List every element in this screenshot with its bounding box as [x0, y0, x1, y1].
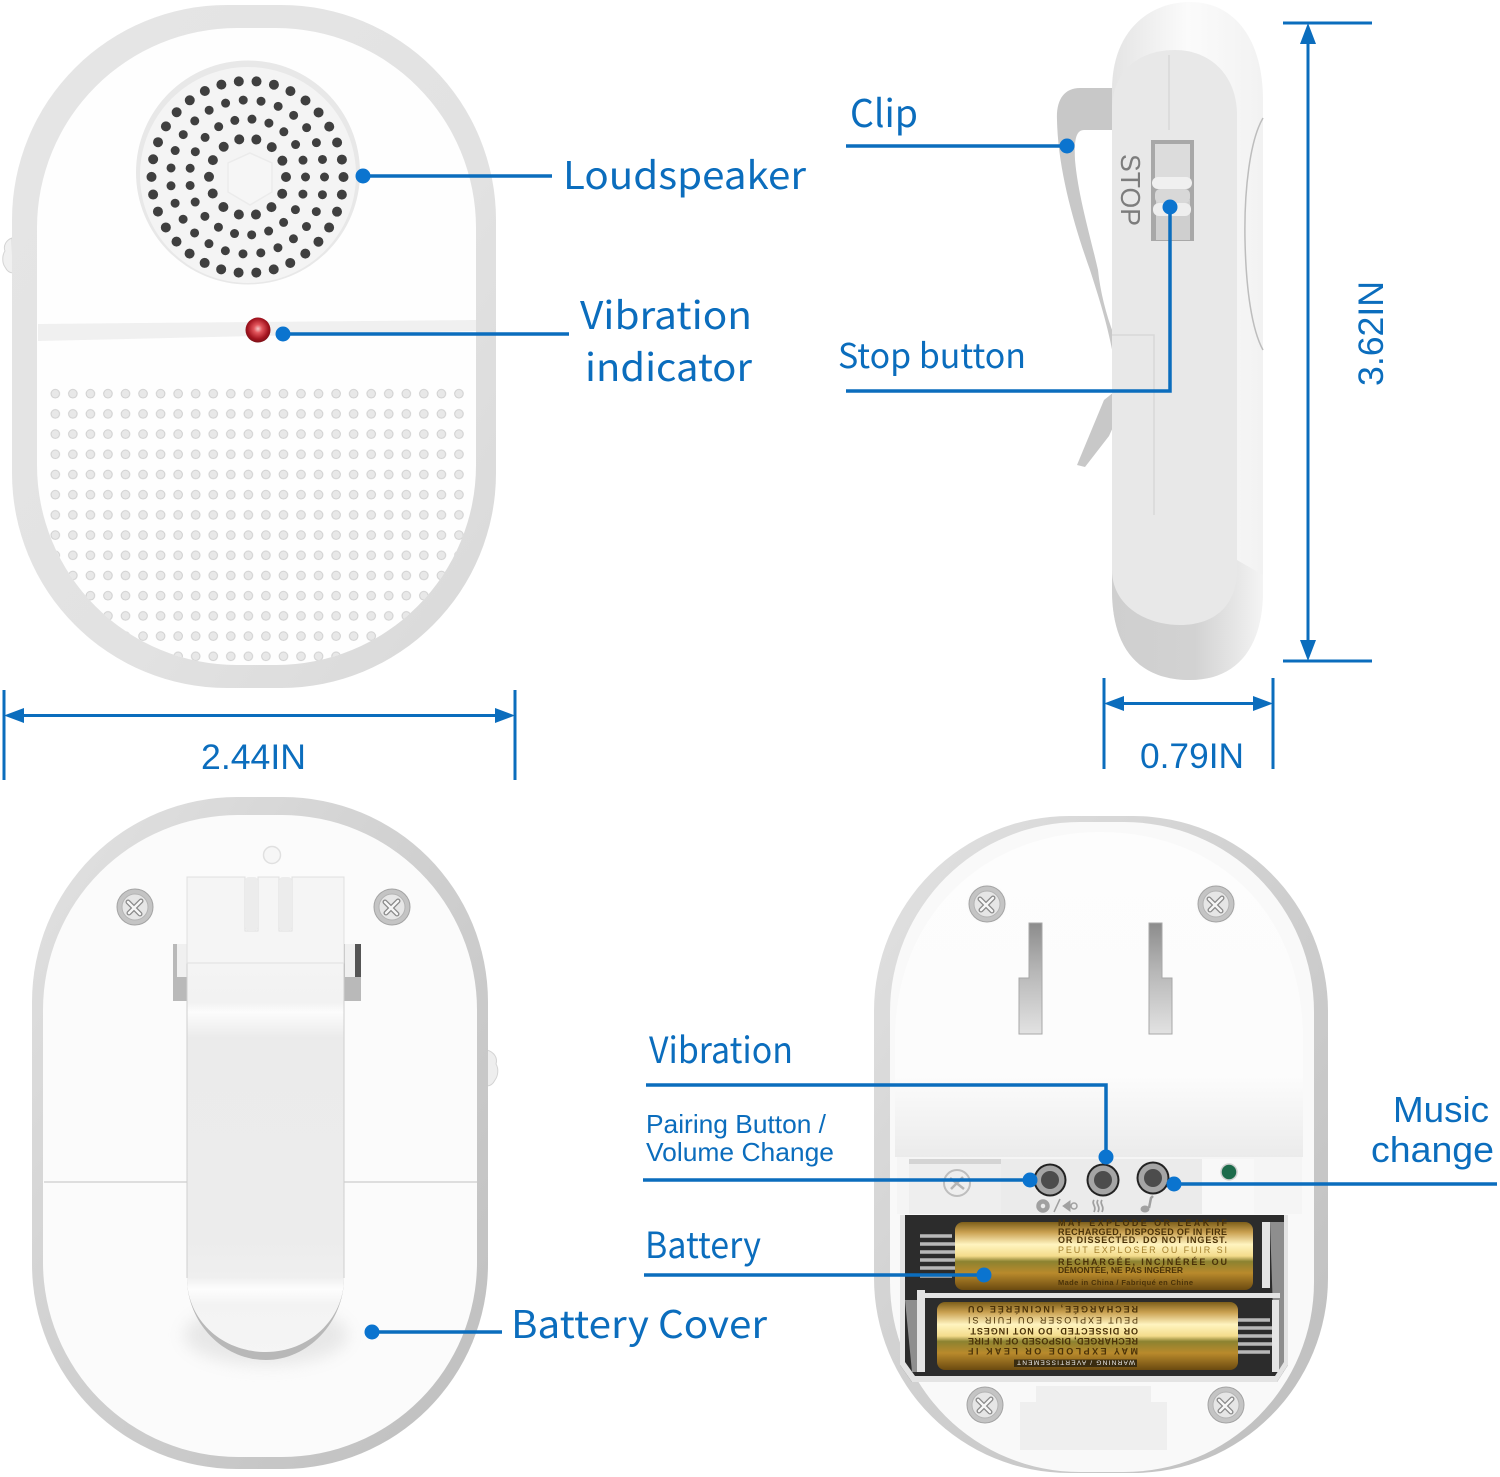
callout: Vibration indicator: indicator [585, 337, 752, 392]
battery spring top [920, 1236, 956, 1276]
opened top-right screw [1196, 884, 1236, 924]
back top-left screw [115, 887, 155, 927]
side face [1112, 50, 1237, 625]
battery top: Made in China / Fabriqué en Chine [1058, 1278, 1193, 1287]
bottom tab [1020, 1386, 1167, 1450]
front white face [37, 28, 476, 665]
side shell [1112, 2, 1263, 680]
callout: Battery Cover: Battery Cover [511, 1294, 767, 1349]
dimension: height 3.62IN [1283, 23, 1391, 661]
control strip [897, 1157, 1302, 1214]
icon: music note [1141, 1196, 1153, 1212]
icon: vibration waves [1093, 1200, 1103, 1212]
callout: Music change: Music [1393, 1089, 1489, 1130]
callout: Pairing Button / Volume Change: Volume Change [646, 1137, 834, 1167]
battery bottom [937, 1302, 1238, 1370]
battery top: RECHARGED, DISPOSED OF IN FIRE [1058, 1227, 1227, 1237]
seam of battery cover [44, 1181, 477, 1183]
dimension: depth 0.79IN [1104, 678, 1273, 776]
icon: settings and volume [1038, 1199, 1077, 1212]
battery top [955, 1218, 1253, 1290]
battery spring bottom [1238, 1320, 1272, 1352]
callout: Vibration [646, 1022, 1114, 1164]
speaker bulge outline [1245, 118, 1263, 350]
callout: Vibration: Vibration [649, 1022, 793, 1074]
opened bottom-right screw [1206, 1385, 1246, 1425]
panel: back view with clip [32, 797, 498, 1469]
callout: Loudspeaker: Loudspeaker [563, 145, 806, 200]
battery compartment [900, 1215, 1288, 1382]
keyhole slot right [1149, 923, 1172, 1034]
speaker grille [136, 60, 360, 284]
dimension: depth 0.79IN: 0.79IN [1140, 737, 1244, 776]
front outer shell [12, 5, 496, 688]
battery bottom: PEUT EXPLOSER OU FUIR SI [968, 1315, 1138, 1325]
indicator groove [38, 320, 476, 341]
button: music [1136, 1162, 1170, 1194]
opened outer shell [874, 816, 1328, 1473]
stop switch [1151, 140, 1194, 241]
panel: opened back with batteries [874, 816, 1328, 1473]
dimension: width 2.44IN: 2.44IN [201, 738, 306, 777]
panel: side view of device [1057, 2, 1263, 680]
green LED [1221, 1164, 1237, 1180]
callout: Loudspeaker [356, 145, 806, 200]
top hole [264, 846, 280, 864]
belt clip [187, 877, 344, 1360]
mount plate [895, 832, 1303, 1157]
battery top: MAY EXPLODE OR LEAK IF [1058, 1218, 1228, 1228]
battery top: DÉMONTÉE, NE PAS INGÉRER [1058, 1265, 1183, 1275]
battery bottom: MAY EXPLODE OR LEAK IF [968, 1346, 1138, 1356]
compartment frame [900, 1215, 1288, 1382]
callout: Stop button [838, 200, 1178, 391]
dimension: width 2.44IN [4, 690, 515, 780]
back top-right screw [372, 887, 412, 927]
opened top-left screw [967, 884, 1007, 924]
battery top: OR DISSECTED. DO NOT INGEST. [1058, 1235, 1227, 1245]
battery top: PEUT EXPLOSER OU FUIR SI [1058, 1245, 1227, 1255]
side button on front view [3, 238, 13, 273]
opened bottom-left screw [965, 1385, 1005, 1425]
callout: Battery [644, 1217, 992, 1282]
perforated lower grille [50, 385, 466, 667]
battery bottom: RECHARGED, DISPOSED OF IN FIRE [968, 1336, 1138, 1346]
callout: Vibration indicator [276, 285, 752, 392]
dimension: height 3.62IN: 3.62IN [1352, 281, 1391, 386]
compartment side blocks [905, 1222, 1284, 1372]
battery bottom: OR DISSECTED. DO NOT INGEST. [968, 1326, 1138, 1336]
callout: Music change: change [1371, 1129, 1494, 1170]
lower shading [1112, 560, 1263, 680]
seam lines [1112, 55, 1169, 515]
callout: Clip [846, 83, 1074, 154]
callout: Battery: Battery [645, 1217, 761, 1269]
callout: Battery Cover [364, 1294, 767, 1349]
battery bottom: WARNING / AVERTISSEMENT [1017, 1358, 1135, 1366]
clip slots [173, 944, 361, 1001]
battery top: RECHARGÉE, INCINÉRÉE OU [1058, 1257, 1227, 1267]
battery bottom: RECHARGÉE, INCINÉRÉE OU [968, 1304, 1138, 1314]
callout: Music change [1166, 1089, 1497, 1192]
red vibration LED [246, 318, 270, 342]
side button on back view [487, 1050, 498, 1086]
keyhole slot left [1019, 923, 1042, 1034]
callout: Pairing Button / Volume Change [643, 1109, 1038, 1188]
panel: front view of device [3, 5, 496, 688]
callout: Stop button: Stop button [838, 329, 1026, 378]
callout: Vibration indicator: Vibration [580, 285, 752, 340]
clip drop shadow [184, 1305, 348, 1365]
belt clip side profile [1057, 88, 1114, 467]
STOP label: STOP [1115, 154, 1146, 226]
battery rails [917, 1222, 1280, 1372]
callout: Pairing Button / Volume Change: Pairing Button / [646, 1109, 827, 1139]
button: vibration [1086, 1164, 1120, 1196]
back outer shell [32, 797, 488, 1469]
back white face [43, 815, 477, 1457]
button: pairing [1034, 1164, 1066, 1196]
opened white face [890, 822, 1314, 1472]
callout: Clip: Clip [850, 83, 918, 138]
